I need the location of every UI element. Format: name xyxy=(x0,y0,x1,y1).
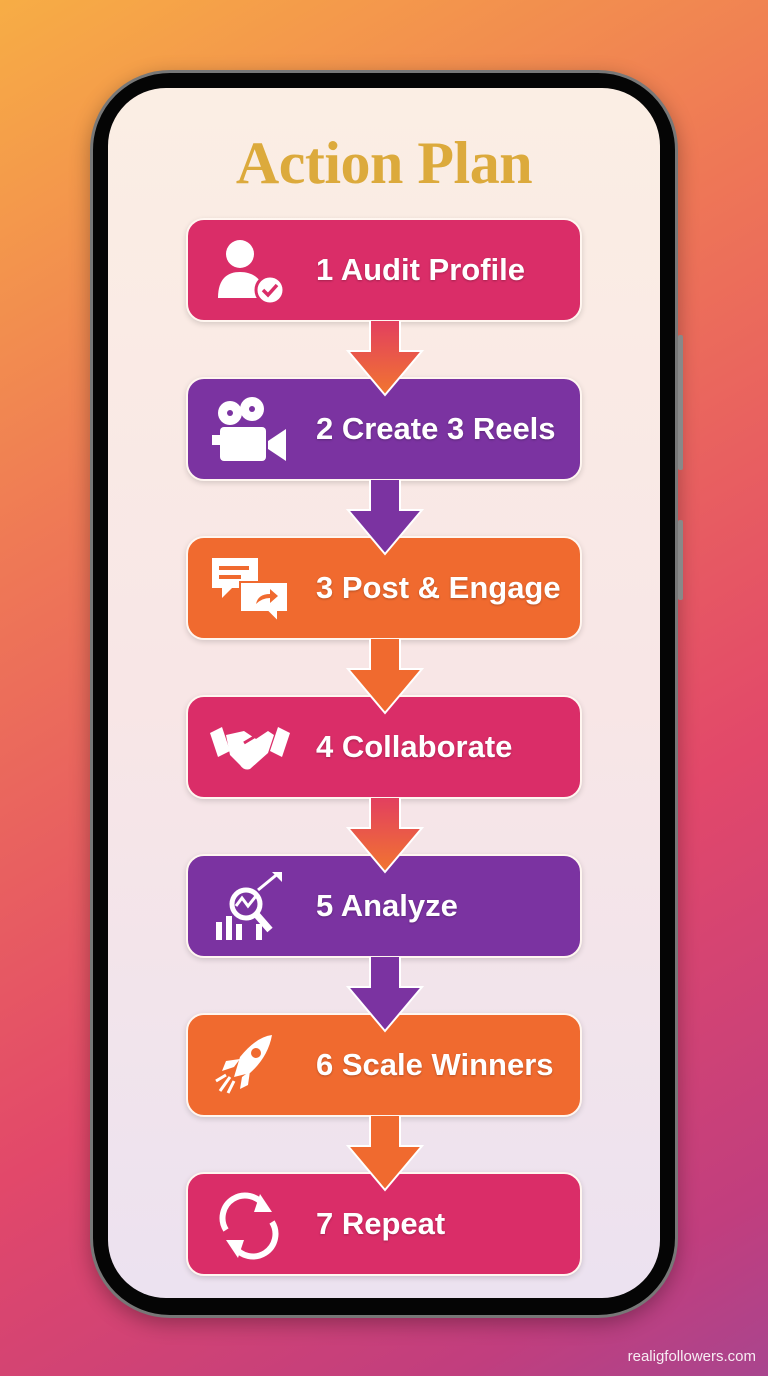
step 7: repeat: 7 Repeat xyxy=(316,1206,445,1241)
icon: handshake xyxy=(210,727,290,770)
step 5: analyze xyxy=(186,854,582,958)
icon: refresh xyxy=(220,1192,278,1260)
icon: movie camera xyxy=(212,397,286,461)
arrow 6 xyxy=(346,1116,424,1192)
arrow 4 xyxy=(346,798,424,874)
step 6: scale winners: 6 Scale Winners xyxy=(316,1047,554,1082)
title: Action Plan xyxy=(236,130,532,196)
step 6: scale winners xyxy=(186,1013,582,1117)
step 7: repeat xyxy=(186,1172,582,1276)
step 2: create reels: 2 Create 3 Reels xyxy=(316,411,556,446)
icon: chart magnifier xyxy=(216,872,282,940)
step 2: create reels xyxy=(186,377,582,481)
step 3: post & engage xyxy=(186,536,582,640)
step 1: audit profile xyxy=(186,218,582,322)
arrow 5 xyxy=(346,957,424,1032)
step 1: audit profile: 1 Audit Profile xyxy=(316,252,525,287)
phone screen xyxy=(108,88,660,1298)
icon: rocket xyxy=(215,1035,272,1094)
step 3: post & engage: 3 Post & Engage xyxy=(316,570,561,605)
arrow 2 xyxy=(346,480,424,556)
arrow 3 xyxy=(346,639,424,714)
step 4: collaborate xyxy=(186,695,582,799)
phone frame xyxy=(90,70,678,1318)
arrow 1 xyxy=(346,321,424,396)
icon: chat bubbles xyxy=(212,558,287,620)
step 4: collaborate: 4 Collaborate xyxy=(316,729,512,764)
step 5: analyze: 5 Analyze xyxy=(316,888,458,923)
watermark: realigfollowers.com xyxy=(628,1348,756,1365)
icon: user check xyxy=(218,240,282,302)
